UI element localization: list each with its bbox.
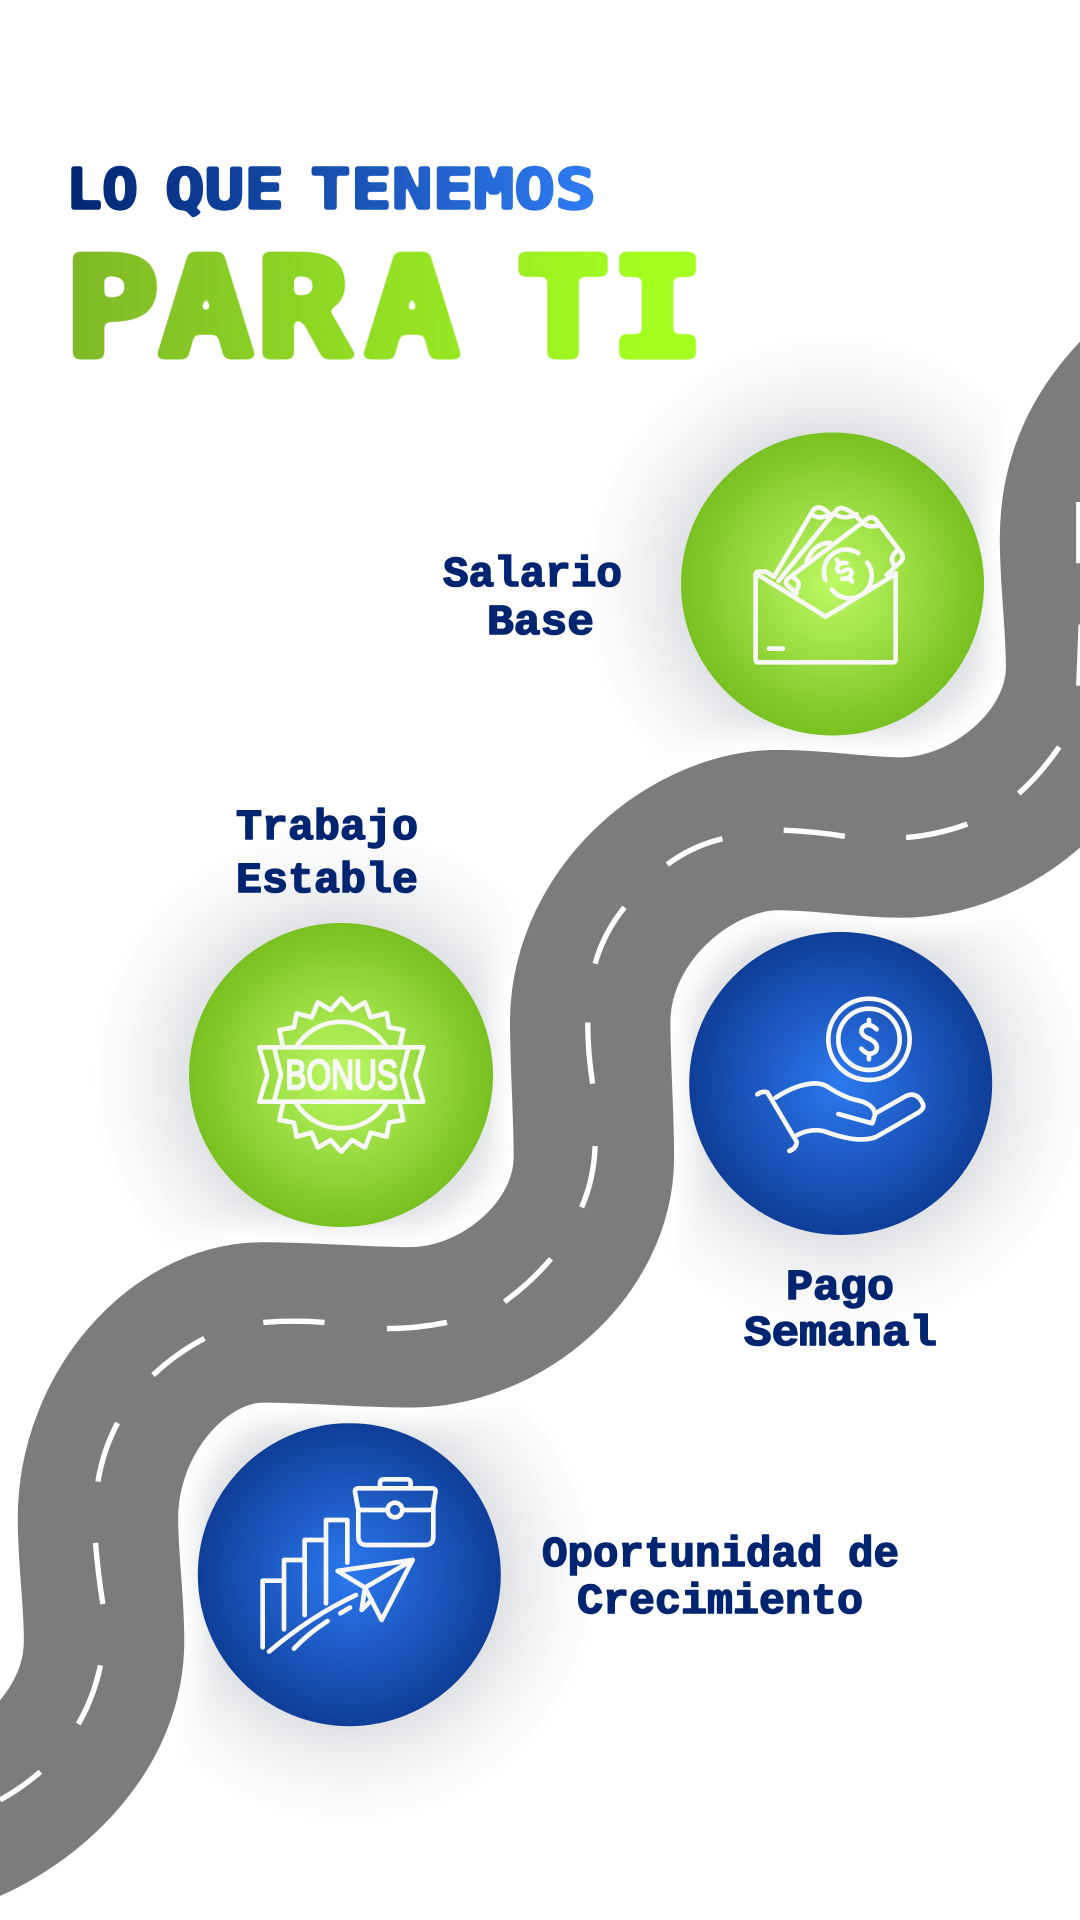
green circle: trabajo estable — [189, 923, 493, 1227]
label: pago semanal: Semanal — [744, 1309, 937, 1358]
circle shadows — [89, 332, 1080, 1827]
title line: lo que tenemos — [66, 158, 596, 222]
road centre dashes — [0, 502, 1080, 1800]
label: pago semanal: Pago — [786, 1263, 894, 1312]
title line: para ti: PARA TI — [65, 229, 705, 388]
blue circle: pago semanal — [689, 932, 992, 1235]
label: salario base — [443, 550, 622, 647]
label: pago semanal — [744, 1263, 937, 1358]
label: salario base: Salario — [443, 550, 622, 599]
blue circle: oportunidad de crecimiento — [198, 1423, 501, 1726]
title — [65, 158, 705, 388]
title line: lo que tenemos: LO — [66, 158, 138, 222]
label: trabajo estable: Trabajo — [236, 803, 418, 852]
icon: bonus badge: BONUS — [285, 1051, 398, 1098]
title line: lo que tenemos: QUE — [165, 158, 284, 222]
road — [0, 349, 1080, 1833]
title line: lo que tenemos: TENEMOS — [310, 158, 596, 222]
icon: bonus badge — [259, 998, 423, 1152]
label: trabajo estable — [236, 803, 418, 905]
icon: envelope with money — [756, 507, 903, 662]
label: trabajo estable: Estable — [236, 856, 418, 905]
label: oportunidad de crecimiento — [542, 1530, 899, 1626]
green circle: salario base — [681, 432, 984, 736]
label: oportunidad de crecimiento: Crecimiento — [577, 1577, 863, 1626]
label: oportunidad de crecimiento: Oportunidad de — [542, 1530, 899, 1579]
icon: hand with coin — [757, 999, 923, 1151]
label: salario base: Base — [487, 598, 594, 647]
icon: growth chart, plane and briefcase — [263, 1479, 436, 1652]
